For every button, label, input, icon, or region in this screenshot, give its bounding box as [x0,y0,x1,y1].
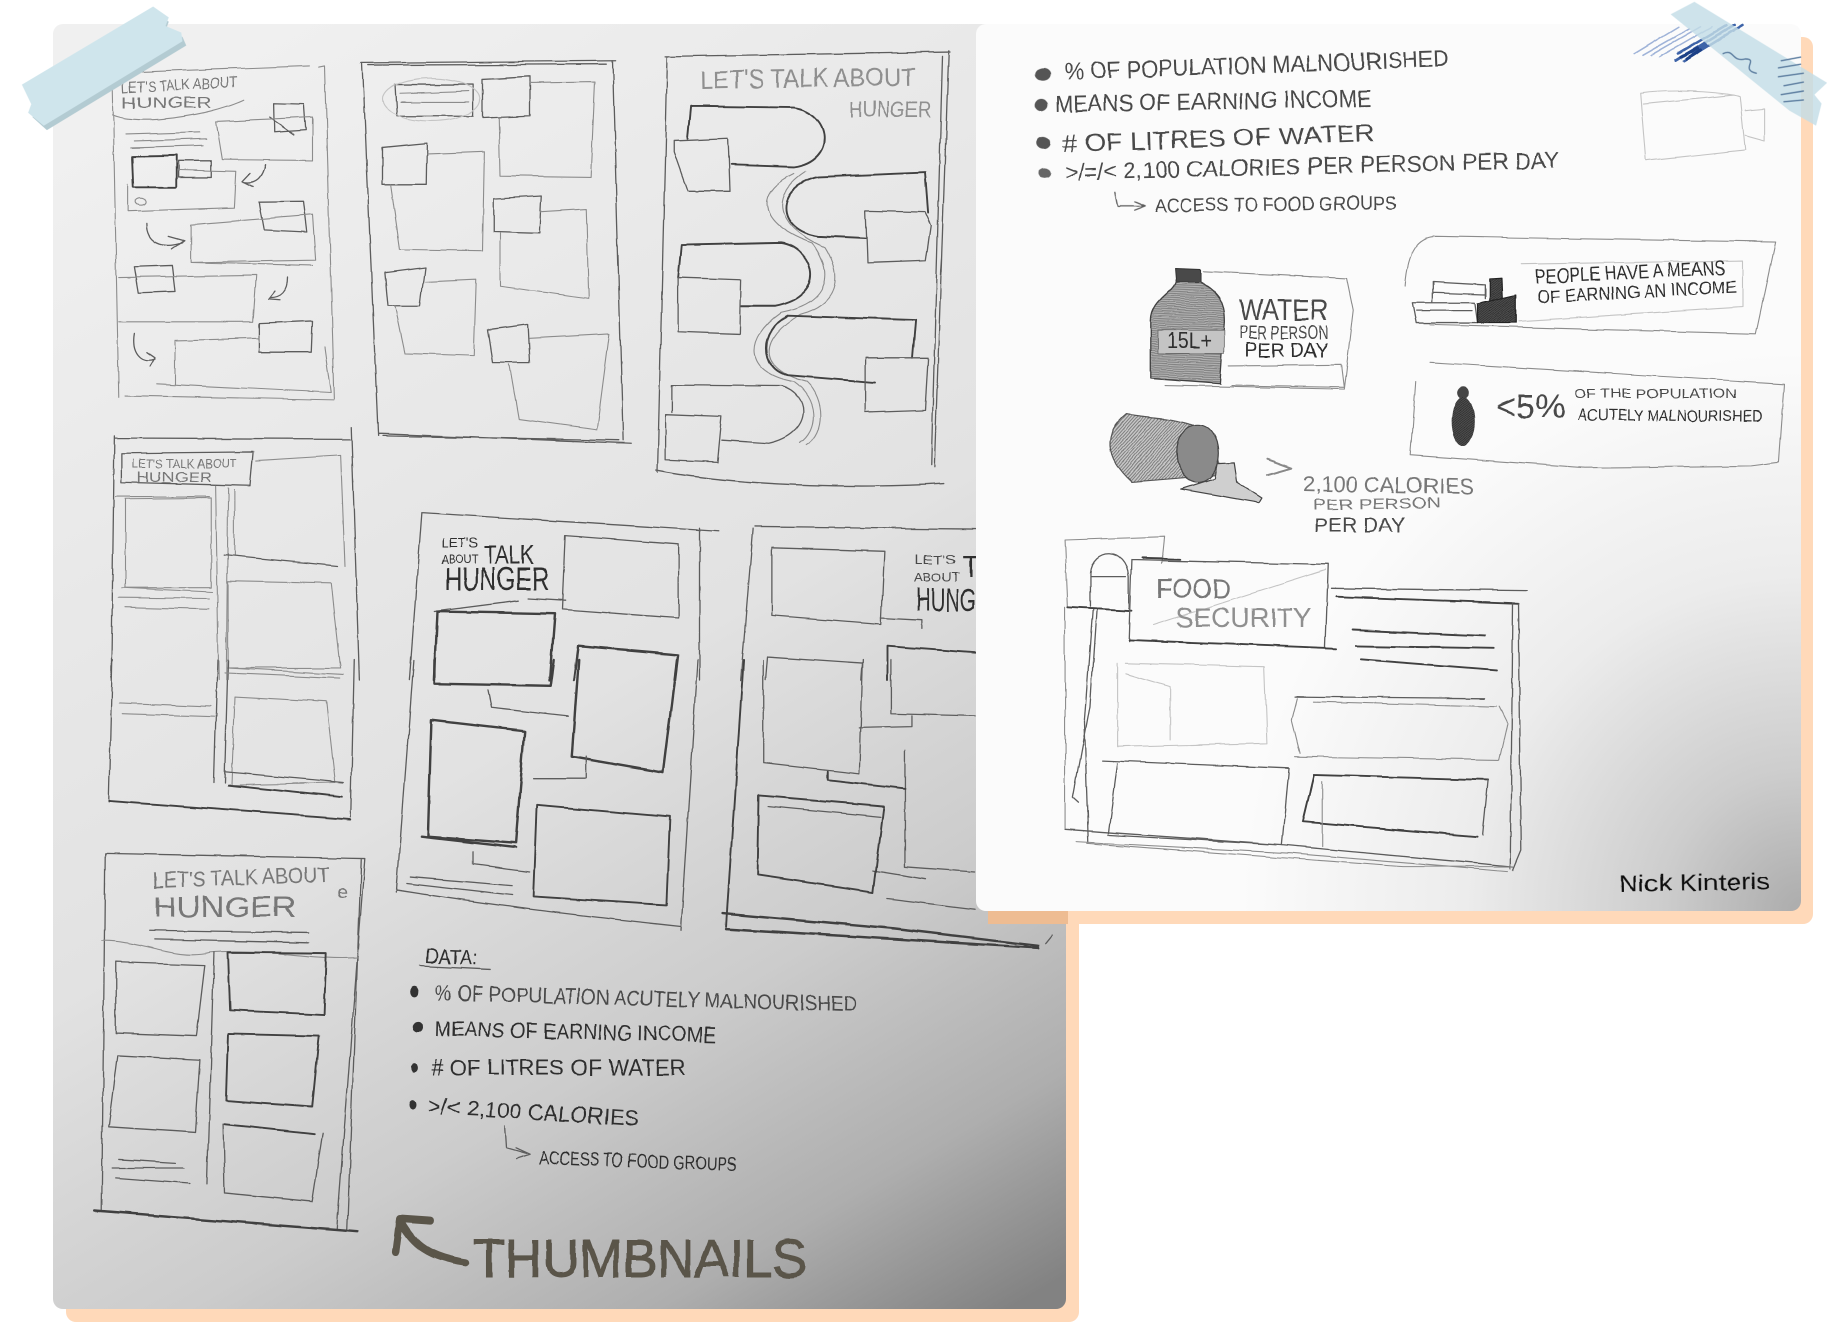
thumbnail sketch 5: scattered boxes: HUNGER [445,561,549,597]
water card with bottle [1151,268,1354,389]
thumbnail sketch 7: two-column grid: LET'S TALK ABOUT [152,862,330,893]
right panel offset shadow [988,37,1813,924]
data list notes: MEANS OF EARNING INCOME [1055,85,1372,118]
thumbnail sketch 6: cropped title layout: T [962,551,980,584]
food security layout sketch: SECURITY [1176,602,1311,633]
thumbnail sketch 7: two-column grid: HUNGER [153,891,296,924]
income card with factory icon: PEOPLE HAVE A MEANS [1534,257,1726,289]
thumbnail sketch 7: two-column grid [95,853,365,1232]
panel: thumbnails sketch page [53,24,1066,1309]
thumbnail sketch 4: title box and columns [109,427,359,819]
data list notes: >/=/< 2,100 CALORIES PER PERSON PER DAY [1064,147,1560,185]
thumbnail sketch 1: arrows layout: LET'S TALK ABOUT [121,74,237,97]
faint box sketch [1640,91,1765,161]
thumbnail sketch 3: winding path layout [656,51,950,486]
thumbnail sketch 5: scattered boxes: ABOUT [442,551,478,566]
data list notes: ACCESS TO FOOD GROUPS [1155,193,1397,217]
data list notes: MEANS OF EARNING INCOME [435,1016,716,1047]
calories note with cornucopia: PER PERSON [1313,495,1441,514]
data list notes [1035,46,1560,217]
data list notes: % OF POPULATION ACUTELY MALNOURISHED [435,980,857,1017]
panel: refined sketch page [976,24,1801,911]
malnourishment card with person icon: ACUTELY MALNOURISHED [1578,407,1762,426]
thumbnail sketch 6: cropped title layout: HUNG [916,582,976,618]
data list notes: ACCESS TO FOOD GROUPS [539,1148,737,1176]
malnourishment card with person icon [1411,362,1784,468]
data list notes: # OF LITRES OF WATER [431,1055,686,1080]
thumbnail sketch 4: title box and columns: HUNGER [137,469,212,486]
thumbnail sketch 3: winding path layout: LET'S TALK ABOUT [700,61,916,95]
thumbnail sketch 7: two-column grid: e [338,882,348,902]
thumbnail sketch 6: cropped title layout: ABOUT [914,570,959,585]
data list notes: DATA: [425,945,478,970]
data list notes [409,945,857,1176]
blue pencil scribble [1635,25,1742,61]
author signature: Nick Kinteris [1619,868,1770,898]
food security layout sketch [1065,537,1527,872]
income card with factory icon [1405,236,1776,334]
tape: top left [22,7,186,130]
calories note with cornucopia [1110,414,1474,537]
data list notes: % OF POPULATION MALNOURISHED [1064,46,1449,86]
arrow: pointing at thumbnails [396,1219,466,1263]
food security layout sketch: FOOD [1156,573,1231,604]
water card with bottle: WATER [1239,294,1328,327]
malnourishment card with person icon: OF THE POPULATION [1574,386,1737,401]
thumbnail sketch 3: winding path layout: HUNGER [849,97,931,122]
water card with bottle: PER PERSON [1239,323,1328,344]
thumbnail sketch 2: two-column boxes [361,61,631,443]
tape: top right [1671,2,1827,126]
water card with bottle: PER DAY [1245,340,1328,362]
data list notes: # OF LITRES OF WATER [1061,120,1375,158]
left panel offset shadow [66,37,1079,1322]
thumbnail sketch 5: scattered boxes [396,513,719,931]
thumbnail sketch 6: cropped title layout: LET'S [915,552,956,567]
thumbnail sketch 6: cropped title layout [723,527,1052,948]
malnourishment card with person icon: <5% [1496,388,1566,426]
heading: thumbnails: THUMBNAILS [473,1229,807,1289]
thumbnail sketch 4: title box and columns: LET'S TALK ABOUT [132,456,237,471]
thumbnail sketch 1: arrows layout: HUNGER [122,95,212,112]
thumbnail sketch 5: scattered boxes: LET'S [441,535,478,550]
data list notes: >/< 2,100 CALORIES [428,1093,640,1131]
thumbnail sketch 1: arrows layout [112,66,334,400]
income card with factory icon: OF EARNING AN INCOME [1537,277,1737,307]
water card with bottle: 15L+ [1167,328,1212,353]
calories note with cornucopia: PER DAY [1314,515,1405,537]
calories note with cornucopia: 2,100 CALORIES [1303,471,1474,499]
thumbnail sketch 5: scattered boxes: TALK [484,540,534,570]
